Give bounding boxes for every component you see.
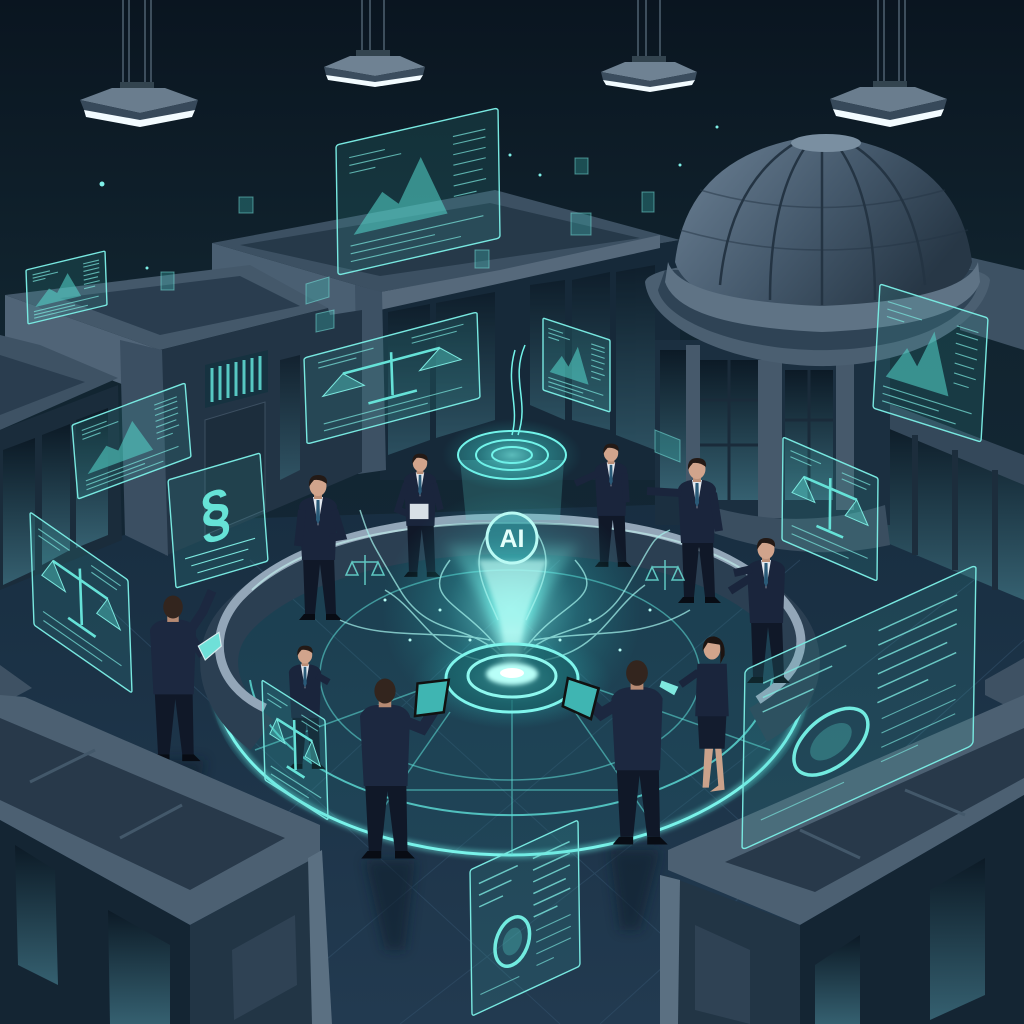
curved wall [219,518,801,735]
rotunda steps [690,500,890,552]
core disc [412,632,612,728]
holo panel: right scales [782,437,878,581]
rotunda with dome [645,134,990,552]
reflections under figures [160,760,660,950]
holo panel: person G front [262,680,328,820]
door [205,402,265,535]
energy column [340,345,690,730]
holo panel: left scales [30,512,132,693]
rotunda body [655,340,890,525]
holo panel: top centre [336,108,500,275]
holo panel: top left [26,251,107,324]
person D [647,458,721,603]
glow halo [382,490,642,730]
person F [150,591,221,761]
person G [289,646,329,769]
funnel [445,545,580,672]
back windows [388,265,655,455]
person B rear left [398,454,440,577]
holo panel: rear chart [543,318,610,412]
floor [0,500,1024,1024]
holo panel: mountain chart [72,383,191,499]
AI badge: AI [500,525,524,553]
lower ring [645,258,990,366]
foreground building left [0,665,332,1024]
AI badge [487,513,537,563]
person C rear right [575,444,631,567]
holo panel: scales centre [304,312,480,444]
holo panel: large right [742,565,976,850]
particles [384,598,652,652]
holo panel: right upper [873,284,988,442]
far left building [0,335,122,590]
platform [212,518,808,855]
sparkles [100,126,718,270]
radial spokes [255,690,770,855]
inner rings [250,680,772,815]
floating data chips [161,158,680,462]
person A [298,475,342,620]
far right building [880,255,1024,600]
upper beam [460,460,564,520]
lamp 1 [80,0,198,127]
foreground building right [660,658,1024,1024]
back building [212,190,680,480]
lamp 2 [324,0,425,87]
person I with tablet [563,660,668,845]
lamp 4 [830,0,947,127]
outer ring [212,660,808,855]
holo panel: section symbol: § [198,473,233,552]
network tendrils [340,510,690,660]
lamp 3 [601,0,697,92]
wall scale icons [346,555,684,590]
dome shell [675,135,972,316]
person H with tablet [360,678,449,858]
left building [5,265,362,556]
floor glow [212,529,808,855]
ceiling lamps [80,0,947,127]
holo panel: section symbol [168,453,268,588]
person E [730,538,790,683]
person J [660,636,729,792]
upper vortex [442,345,582,491]
holo panel: bottom [470,820,580,1016]
